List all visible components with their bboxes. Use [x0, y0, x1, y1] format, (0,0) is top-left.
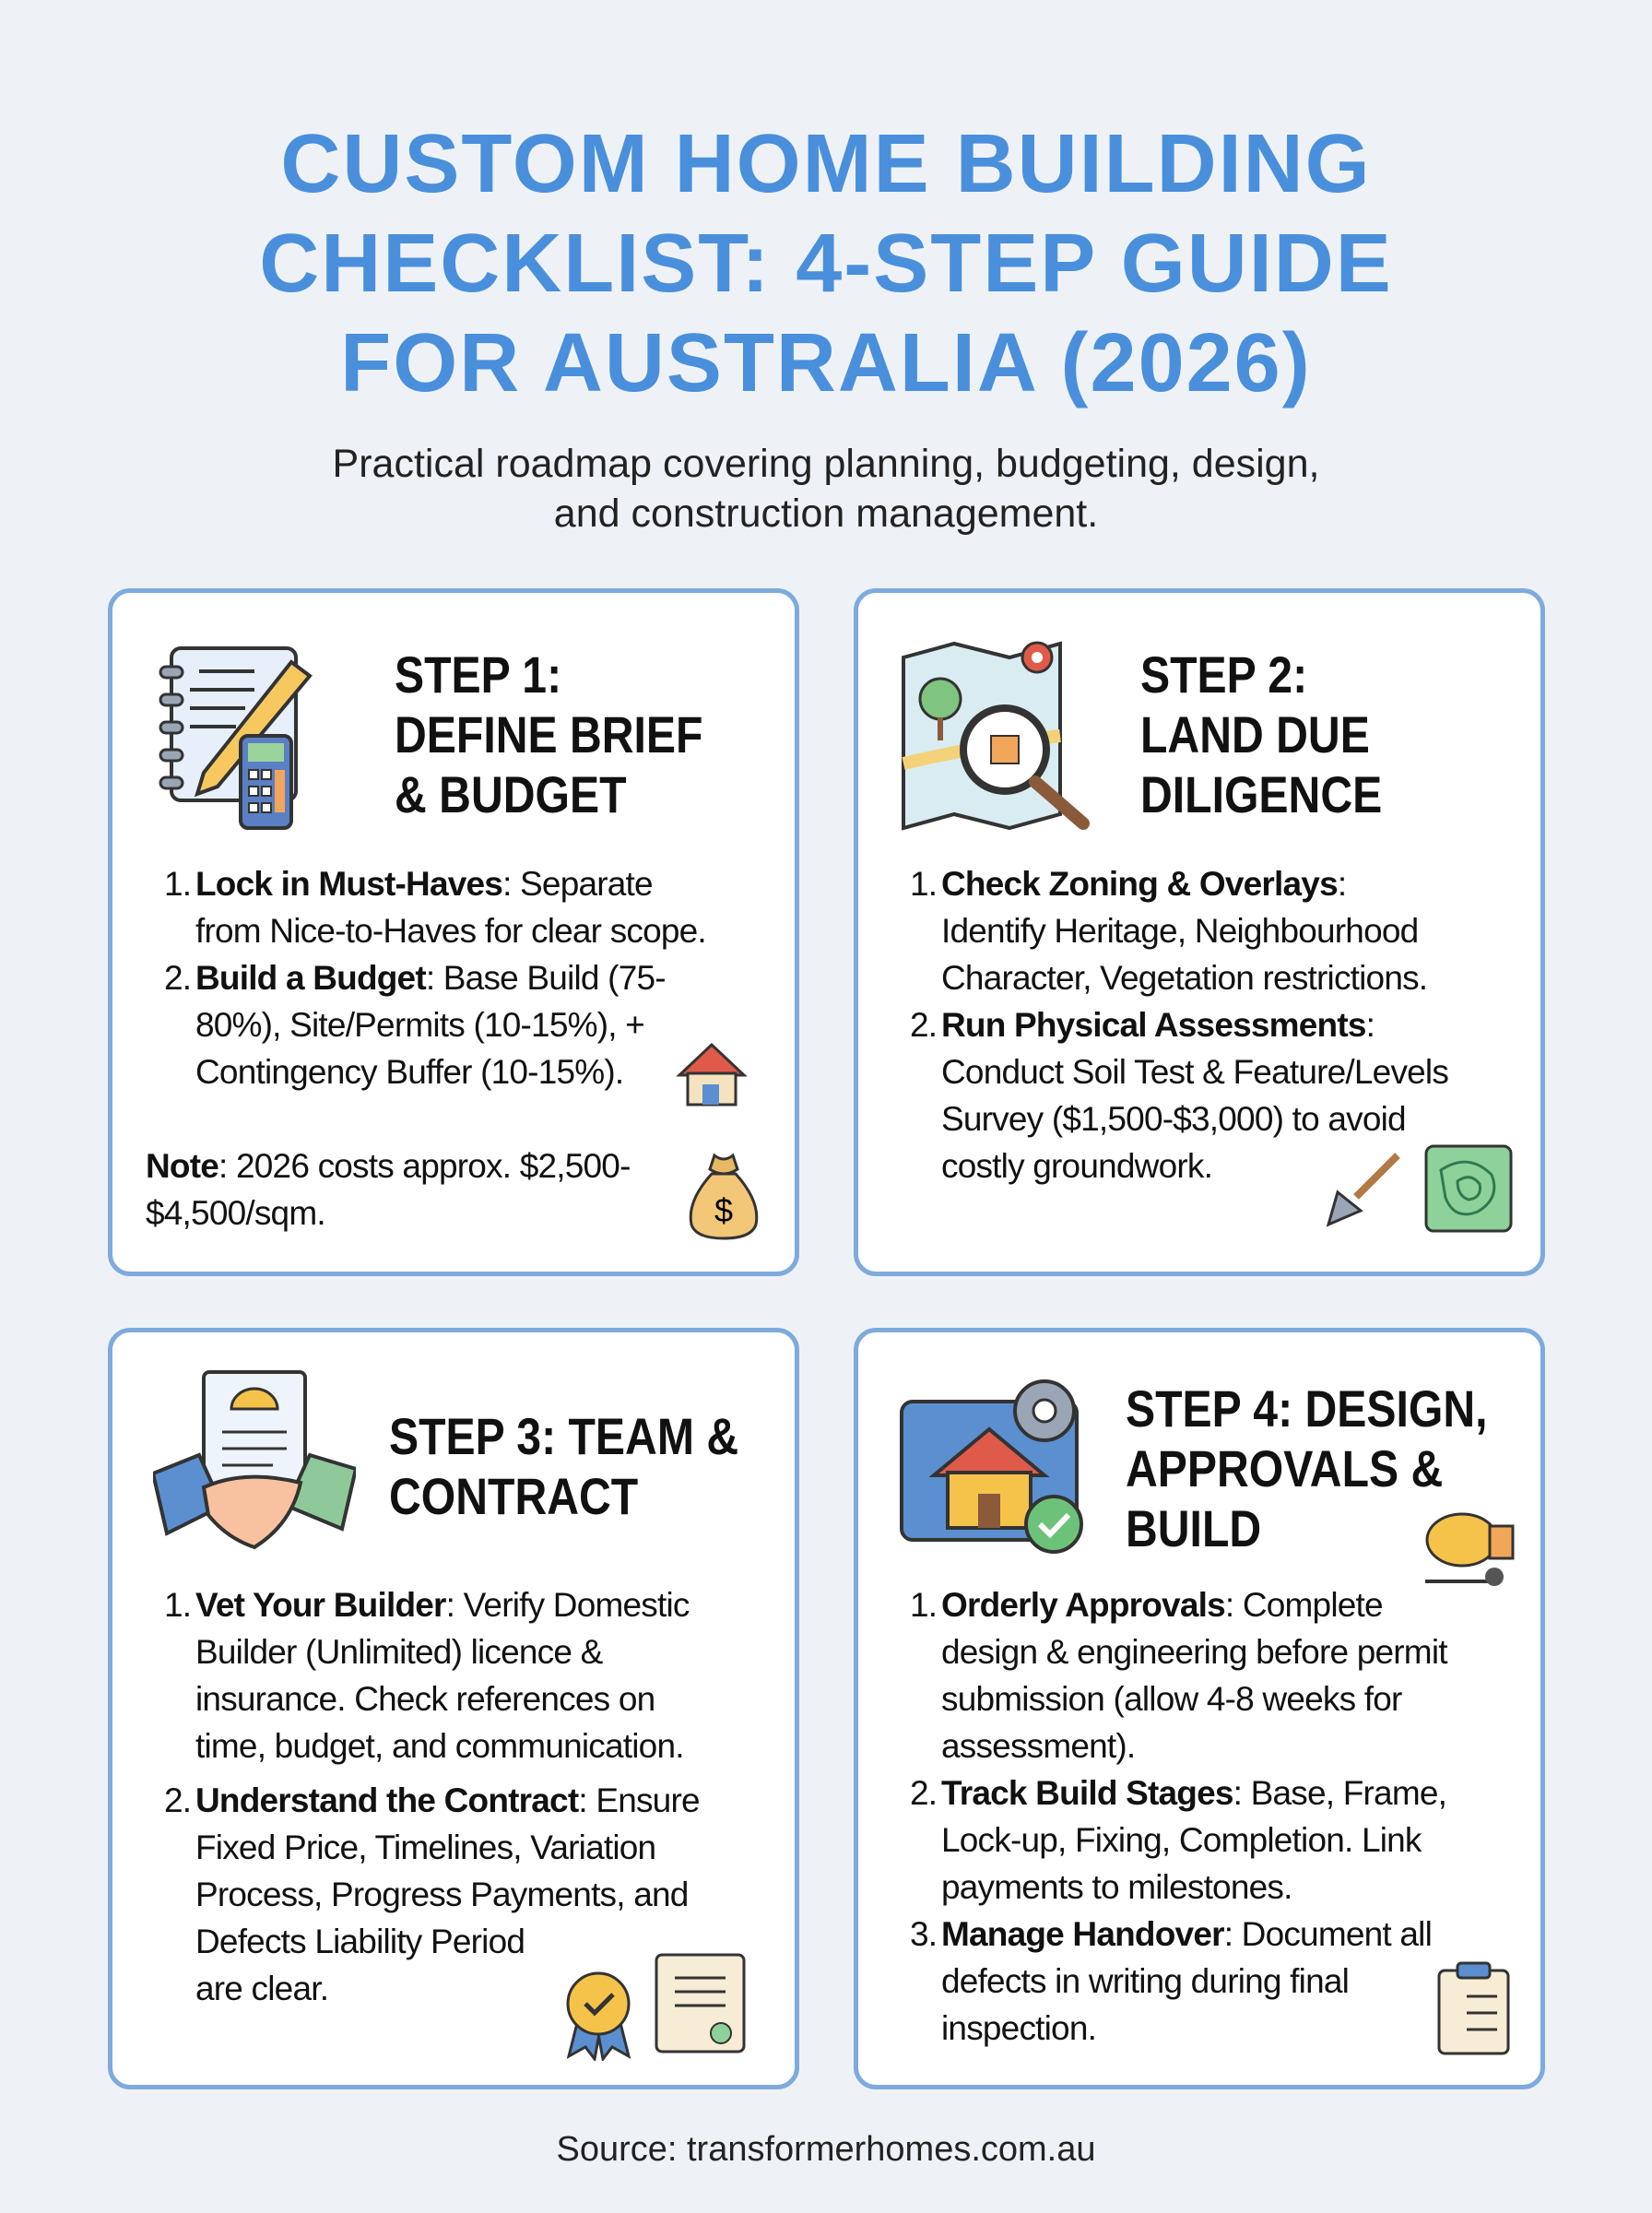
subtitle: Practical roadmap covering planning, budgeting, design, [333, 442, 1319, 486]
list: Manage Handover: Document all [941, 1915, 1432, 1953]
list: 1. [910, 1586, 937, 1624]
list: Builder (Unlimited) licence & [195, 1633, 603, 1671]
list: Fixed Price, Timelines, Variation [195, 1828, 655, 1866]
heading [395, 645, 702, 823]
title: CHECKLIST: 4-STEP GUIDE [259, 218, 1393, 310]
heading [1126, 1379, 1488, 1557]
list [164, 1586, 700, 2007]
heading: STEP 3: TEAM & [389, 1407, 738, 1465]
list: 1. [164, 865, 191, 903]
panel: step 3 [108, 1328, 799, 2089]
list: Understand the Contract: Ensure [195, 1781, 700, 1819]
list: defects in writing during final [941, 1962, 1349, 2000]
icon: handshake contract [153, 1370, 356, 1549]
icon: shovel [1326, 1153, 1400, 1227]
note: $4,500/sqm. [146, 1194, 325, 1232]
icon: clipboard [1438, 1962, 1510, 2054]
list: 2. [910, 1774, 937, 1812]
heading: CONTRACT [389, 1467, 638, 1525]
list: 3. [910, 1915, 937, 1953]
panel: step 1 [108, 588, 799, 1276]
list: Conduct Soil Test & Feature/Levels [941, 1053, 1448, 1091]
list: Contingency Buffer (10-15%). [195, 1053, 623, 1091]
icon: scroll [655, 1953, 745, 2053]
list: Track Build Stages: Base, Frame, [941, 1774, 1446, 1812]
heading [1140, 645, 1382, 823]
list: are clear. [195, 1970, 328, 2007]
note [146, 1147, 631, 1232]
list: design & engineering before permit [941, 1633, 1447, 1671]
icon: money bag: $ [714, 1191, 733, 1229]
list: from Nice-to-Haves for clear scope. [195, 912, 706, 950]
list: 1. [164, 1586, 191, 1624]
source footer: Source: transformerhomes.com.au [556, 2130, 1095, 2169]
heading: STEP 4: DESIGN, [1126, 1379, 1488, 1438]
heading: STEP 1: [395, 645, 561, 704]
list: payments to milestones. [941, 1868, 1292, 1906]
icon: badge [566, 1971, 631, 2061]
list: Survey ($1,500-$3,000) to avoid [941, 1100, 1406, 1138]
list: time, budget, and communication. [195, 1727, 684, 1765]
list [164, 865, 706, 1091]
list: assessment). [941, 1727, 1135, 1765]
list: Character, Vegetation restrictions. [941, 959, 1427, 997]
list: Lock in Must-Haves: Separate [195, 865, 653, 903]
title [259, 118, 1393, 409]
list: inspection. [941, 2009, 1096, 2047]
heading: LAND DUE [1140, 705, 1370, 763]
list: Identify Heritage, Neighbourhood [941, 912, 1418, 950]
heading: DEFINE BRIEF [395, 705, 702, 763]
icon: money bag [690, 1153, 758, 1239]
heading: BUILD [1126, 1499, 1261, 1557]
heading [389, 1407, 738, 1525]
list: Orderly Approvals: Complete [941, 1586, 1383, 1624]
list: Process, Progress Payments, and [195, 1876, 689, 1913]
list: Check Zoning & Overlays: [941, 865, 1346, 903]
icon: house [676, 1043, 748, 1106]
list: 80%), Site/Permits (10-15%), + [195, 1006, 644, 1044]
heading: & BUDGET [395, 765, 627, 823]
icon: cement mixer [1425, 1512, 1514, 1586]
title: CUSTOM HOME BUILDING [280, 118, 1372, 210]
list: 2. [164, 1781, 191, 1819]
list: insurance. Check references on [195, 1680, 655, 1718]
list: costly groundwork. [941, 1147, 1212, 1185]
icon: blueprint house gear [900, 1379, 1083, 1554]
heading: DILIGENCE [1140, 765, 1382, 823]
subtitle: and construction management. [554, 491, 1098, 536]
list: Defects Liability Period [195, 1923, 525, 1960]
note: Note: 2026 costs approx. $2,500- [146, 1147, 631, 1185]
list: Vet Your Builder: Verify Domestic [195, 1586, 690, 1624]
heading: STEP 2: [1140, 645, 1307, 704]
list: Run Physical Assessments: [941, 1006, 1375, 1044]
list: submission (allow 4-8 weeks for [941, 1680, 1402, 1718]
list: Build a Budget: Base Build (75- [195, 959, 666, 997]
panel: step 4 [854, 1328, 1545, 2089]
icon: map magnifier [902, 641, 1090, 831]
heading: APPROVALS & [1126, 1439, 1443, 1497]
list [910, 1586, 1447, 2047]
icon: notebook pencil calculator [159, 646, 313, 830]
list: 2. [164, 959, 191, 997]
icon: topo map [1425, 1145, 1512, 1232]
list: Lock-up, Fixing, Completion. Link [941, 1821, 1422, 1859]
list: 2. [910, 1006, 937, 1044]
panel: step 2 [854, 588, 1545, 1276]
subtitle [333, 442, 1319, 536]
title: FOR AUSTRALIA (2026) [340, 317, 1312, 409]
list [910, 865, 1448, 1185]
list: 1. [910, 865, 937, 903]
